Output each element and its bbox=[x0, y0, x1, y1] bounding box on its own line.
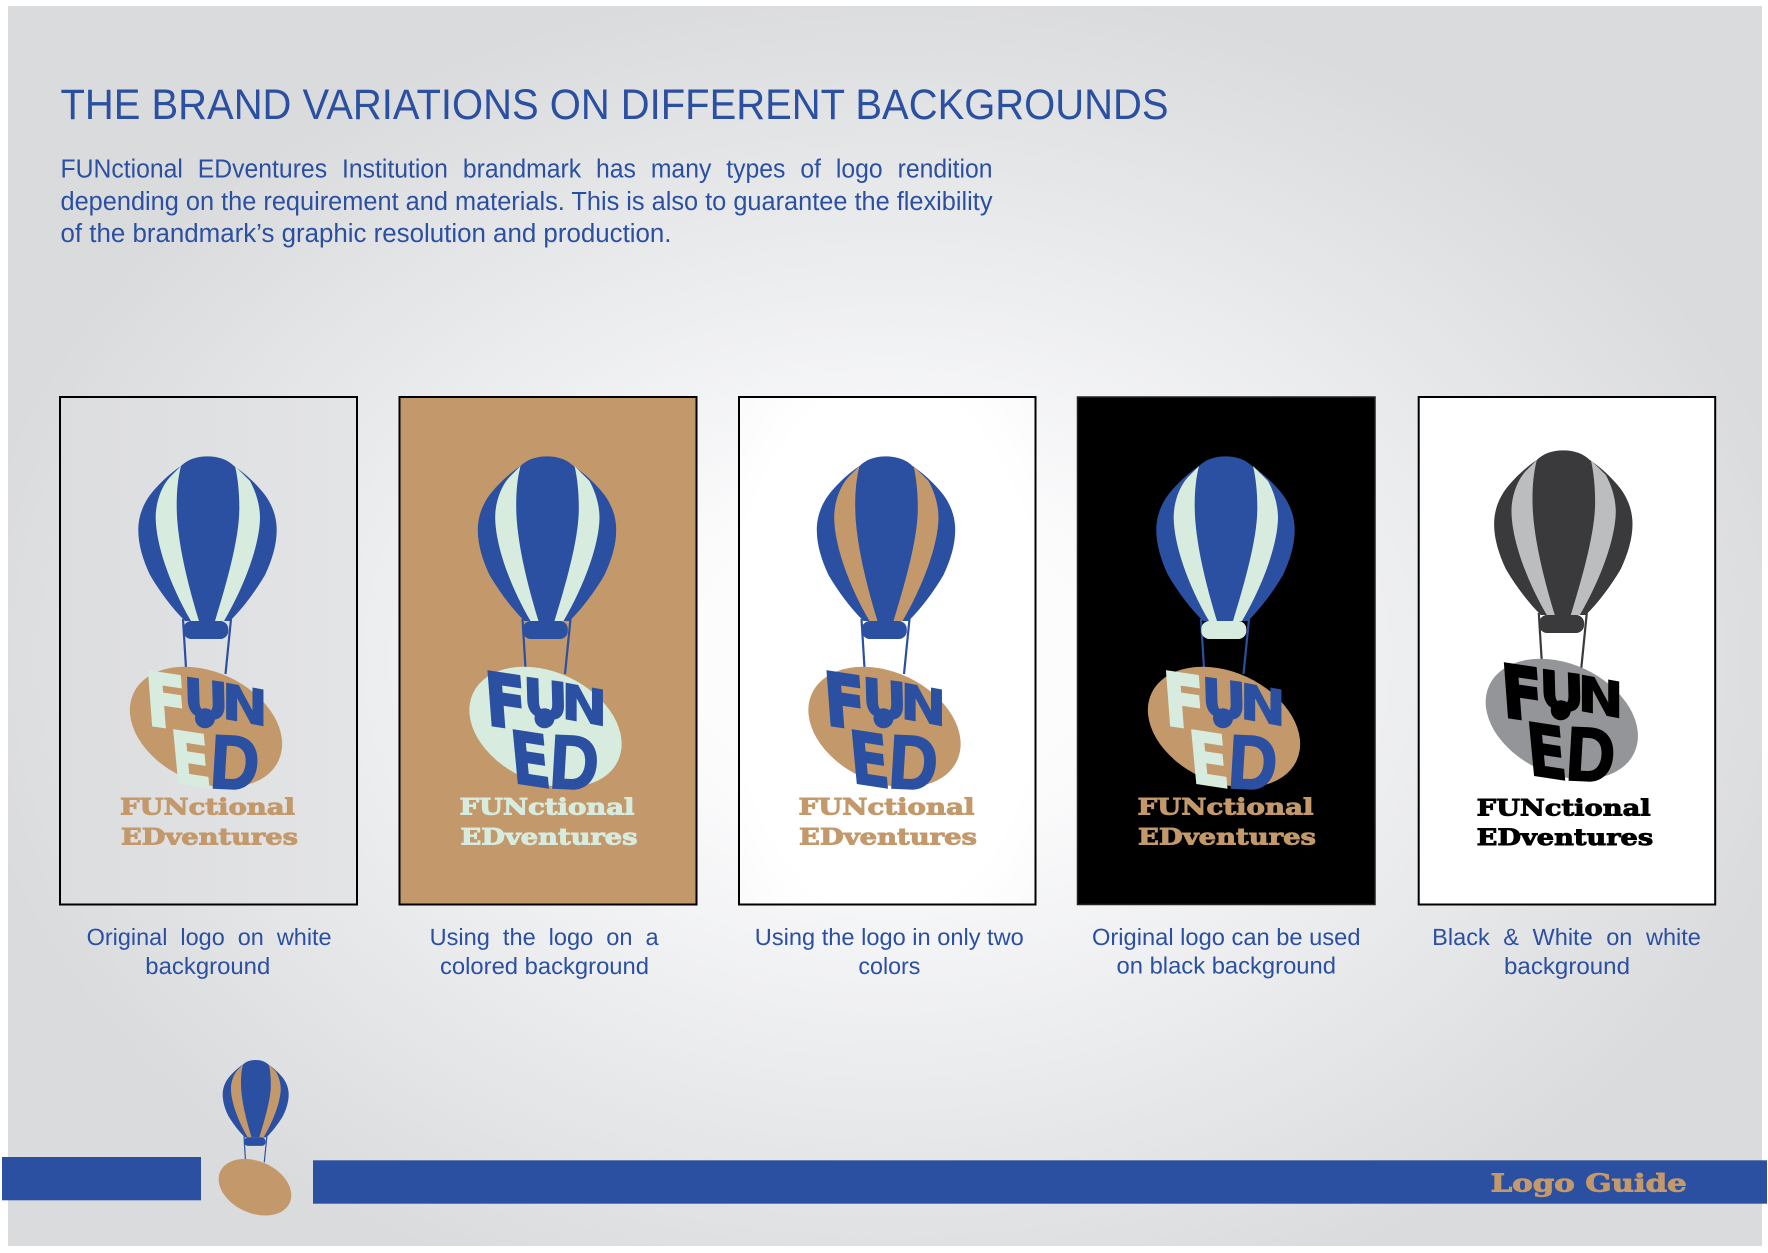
title: THE BRAND VARIATIONS ON DIFFERENT BACKGROUNDS bbox=[60, 81, 1168, 129]
logo: FUN ED emblem: E bbox=[1523, 706, 1571, 798]
footer logo: small balloon bbox=[209, 1060, 301, 1227]
panel: original logo on white bbox=[60, 397, 357, 904]
brand name: EDventures bbox=[460, 824, 638, 850]
footer bar: left bbox=[2, 1157, 201, 1200]
logo: FUN ED emblem: E bbox=[1185, 714, 1233, 806]
caption: original logo on white bbox=[87, 924, 332, 979]
brand name: EDventures bbox=[1477, 825, 1653, 851]
brand name: FUNctional bbox=[798, 794, 974, 820]
logo: FUN ED emblem bbox=[450, 643, 641, 811]
logo: FUN ED emblem: F bbox=[143, 657, 190, 748]
footer bar: right bbox=[313, 1160, 1767, 1204]
logo: FUN ED emblem bbox=[1128, 643, 1320, 811]
logo: FUN ED emblem: E bbox=[846, 714, 893, 806]
logo: FUN ED emblem: U bbox=[1200, 666, 1248, 734]
logo: FUN ED emblem: D bbox=[208, 720, 262, 807]
brand name bbox=[1477, 796, 1653, 851]
icon: hot air balloon bbox=[1494, 450, 1632, 668]
caption: original logo on white: Original logo on white bbox=[87, 924, 332, 950]
brand name: FUNctional bbox=[460, 794, 634, 820]
logo: FUN ED emblem: D bbox=[1564, 712, 1617, 799]
brand name bbox=[460, 794, 638, 850]
caption: logo in two colors bbox=[755, 924, 1024, 979]
logo: FUN ED emblem: F bbox=[482, 657, 530, 748]
panel: logo on colored background bbox=[400, 397, 696, 904]
logo: FUN ED emblem: F bbox=[1499, 649, 1546, 740]
icon: hot air balloon bbox=[817, 456, 955, 674]
brand name bbox=[798, 794, 977, 850]
logo: FUN ED emblem bbox=[110, 643, 302, 811]
icon: hot air balloon bbox=[478, 456, 616, 674]
icon: hot air balloon bbox=[138, 456, 277, 674]
caption: black and white on white: background bbox=[1504, 953, 1630, 979]
intro text block: depending on the requirement and materials. This is also to guarantee the flexibility bbox=[60, 188, 993, 216]
logo: FUN ED emblem: N bbox=[1240, 673, 1286, 739]
brand name bbox=[120, 794, 298, 850]
logo: FUN ED emblem bbox=[789, 643, 980, 811]
logo: FUN ED emblem: E bbox=[167, 714, 215, 806]
caption: logo on colored background: colored background bbox=[440, 953, 649, 979]
brand name: EDventures bbox=[121, 824, 298, 850]
intro text block: of the brandmark’s graphic resolution and production. bbox=[60, 220, 672, 248]
caption: original logo on white: background bbox=[145, 953, 270, 979]
caption: logo in two colors: colors bbox=[858, 953, 920, 979]
logo: FUN ED emblem: N bbox=[222, 673, 268, 739]
brand name: EDventures bbox=[799, 824, 977, 850]
caption: black and white on white: Black & White on white bbox=[1432, 924, 1701, 950]
caption: black and white on white bbox=[1432, 924, 1701, 979]
caption: original logo on black bbox=[1092, 924, 1360, 978]
panel: black and white on white bbox=[1419, 397, 1715, 904]
footer label: Logo Guide bbox=[1491, 1169, 1687, 1198]
logo: FUN ED emblem: U bbox=[861, 666, 908, 734]
panel: logo in two colors bbox=[739, 397, 1036, 904]
logo: FUN ED emblem bbox=[1466, 635, 1658, 803]
logo: FUN ED emblem: D bbox=[548, 720, 601, 807]
intro text block bbox=[60, 156, 993, 248]
icon: hot air balloon bbox=[1156, 456, 1295, 674]
logo: FUN ED emblem: U bbox=[182, 666, 230, 734]
brand name bbox=[1138, 794, 1316, 850]
logo: FUN ED emblem: D bbox=[887, 720, 940, 807]
caption: original logo on black: Original logo can be used bbox=[1092, 924, 1360, 950]
caption: logo in two colors: Using the logo in only two bbox=[755, 924, 1024, 950]
caption: logo on colored background bbox=[430, 924, 660, 979]
intro text block: FUNctional EDventures Institution brandmark has many types of logo rendition bbox=[60, 156, 992, 184]
brand name: EDventures bbox=[1138, 824, 1316, 850]
logo: FUN ED emblem: F bbox=[821, 657, 869, 748]
brand name: FUNctional bbox=[1477, 796, 1651, 822]
caption: original logo on black: on black background bbox=[1116, 952, 1336, 978]
logo: FUN ED emblem: N bbox=[900, 673, 946, 739]
logo: FUN ED emblem: U bbox=[522, 666, 569, 734]
caption: logo on colored background: Using the logo on a bbox=[430, 924, 660, 950]
logo: FUN ED emblem: D bbox=[1226, 720, 1280, 807]
logo: FUN ED emblem: U bbox=[1538, 658, 1586, 726]
brand name: FUNctional bbox=[1138, 794, 1314, 820]
logo: FUN ED emblem: E bbox=[507, 714, 554, 806]
brand name: FUNctional bbox=[120, 794, 295, 820]
logo: FUN ED emblem: N bbox=[1577, 665, 1624, 731]
logo: FUN ED emblem: N bbox=[561, 673, 607, 739]
panel: original logo on black bbox=[1078, 397, 1375, 904]
logo: FUN ED emblem: F bbox=[1161, 657, 1208, 748]
